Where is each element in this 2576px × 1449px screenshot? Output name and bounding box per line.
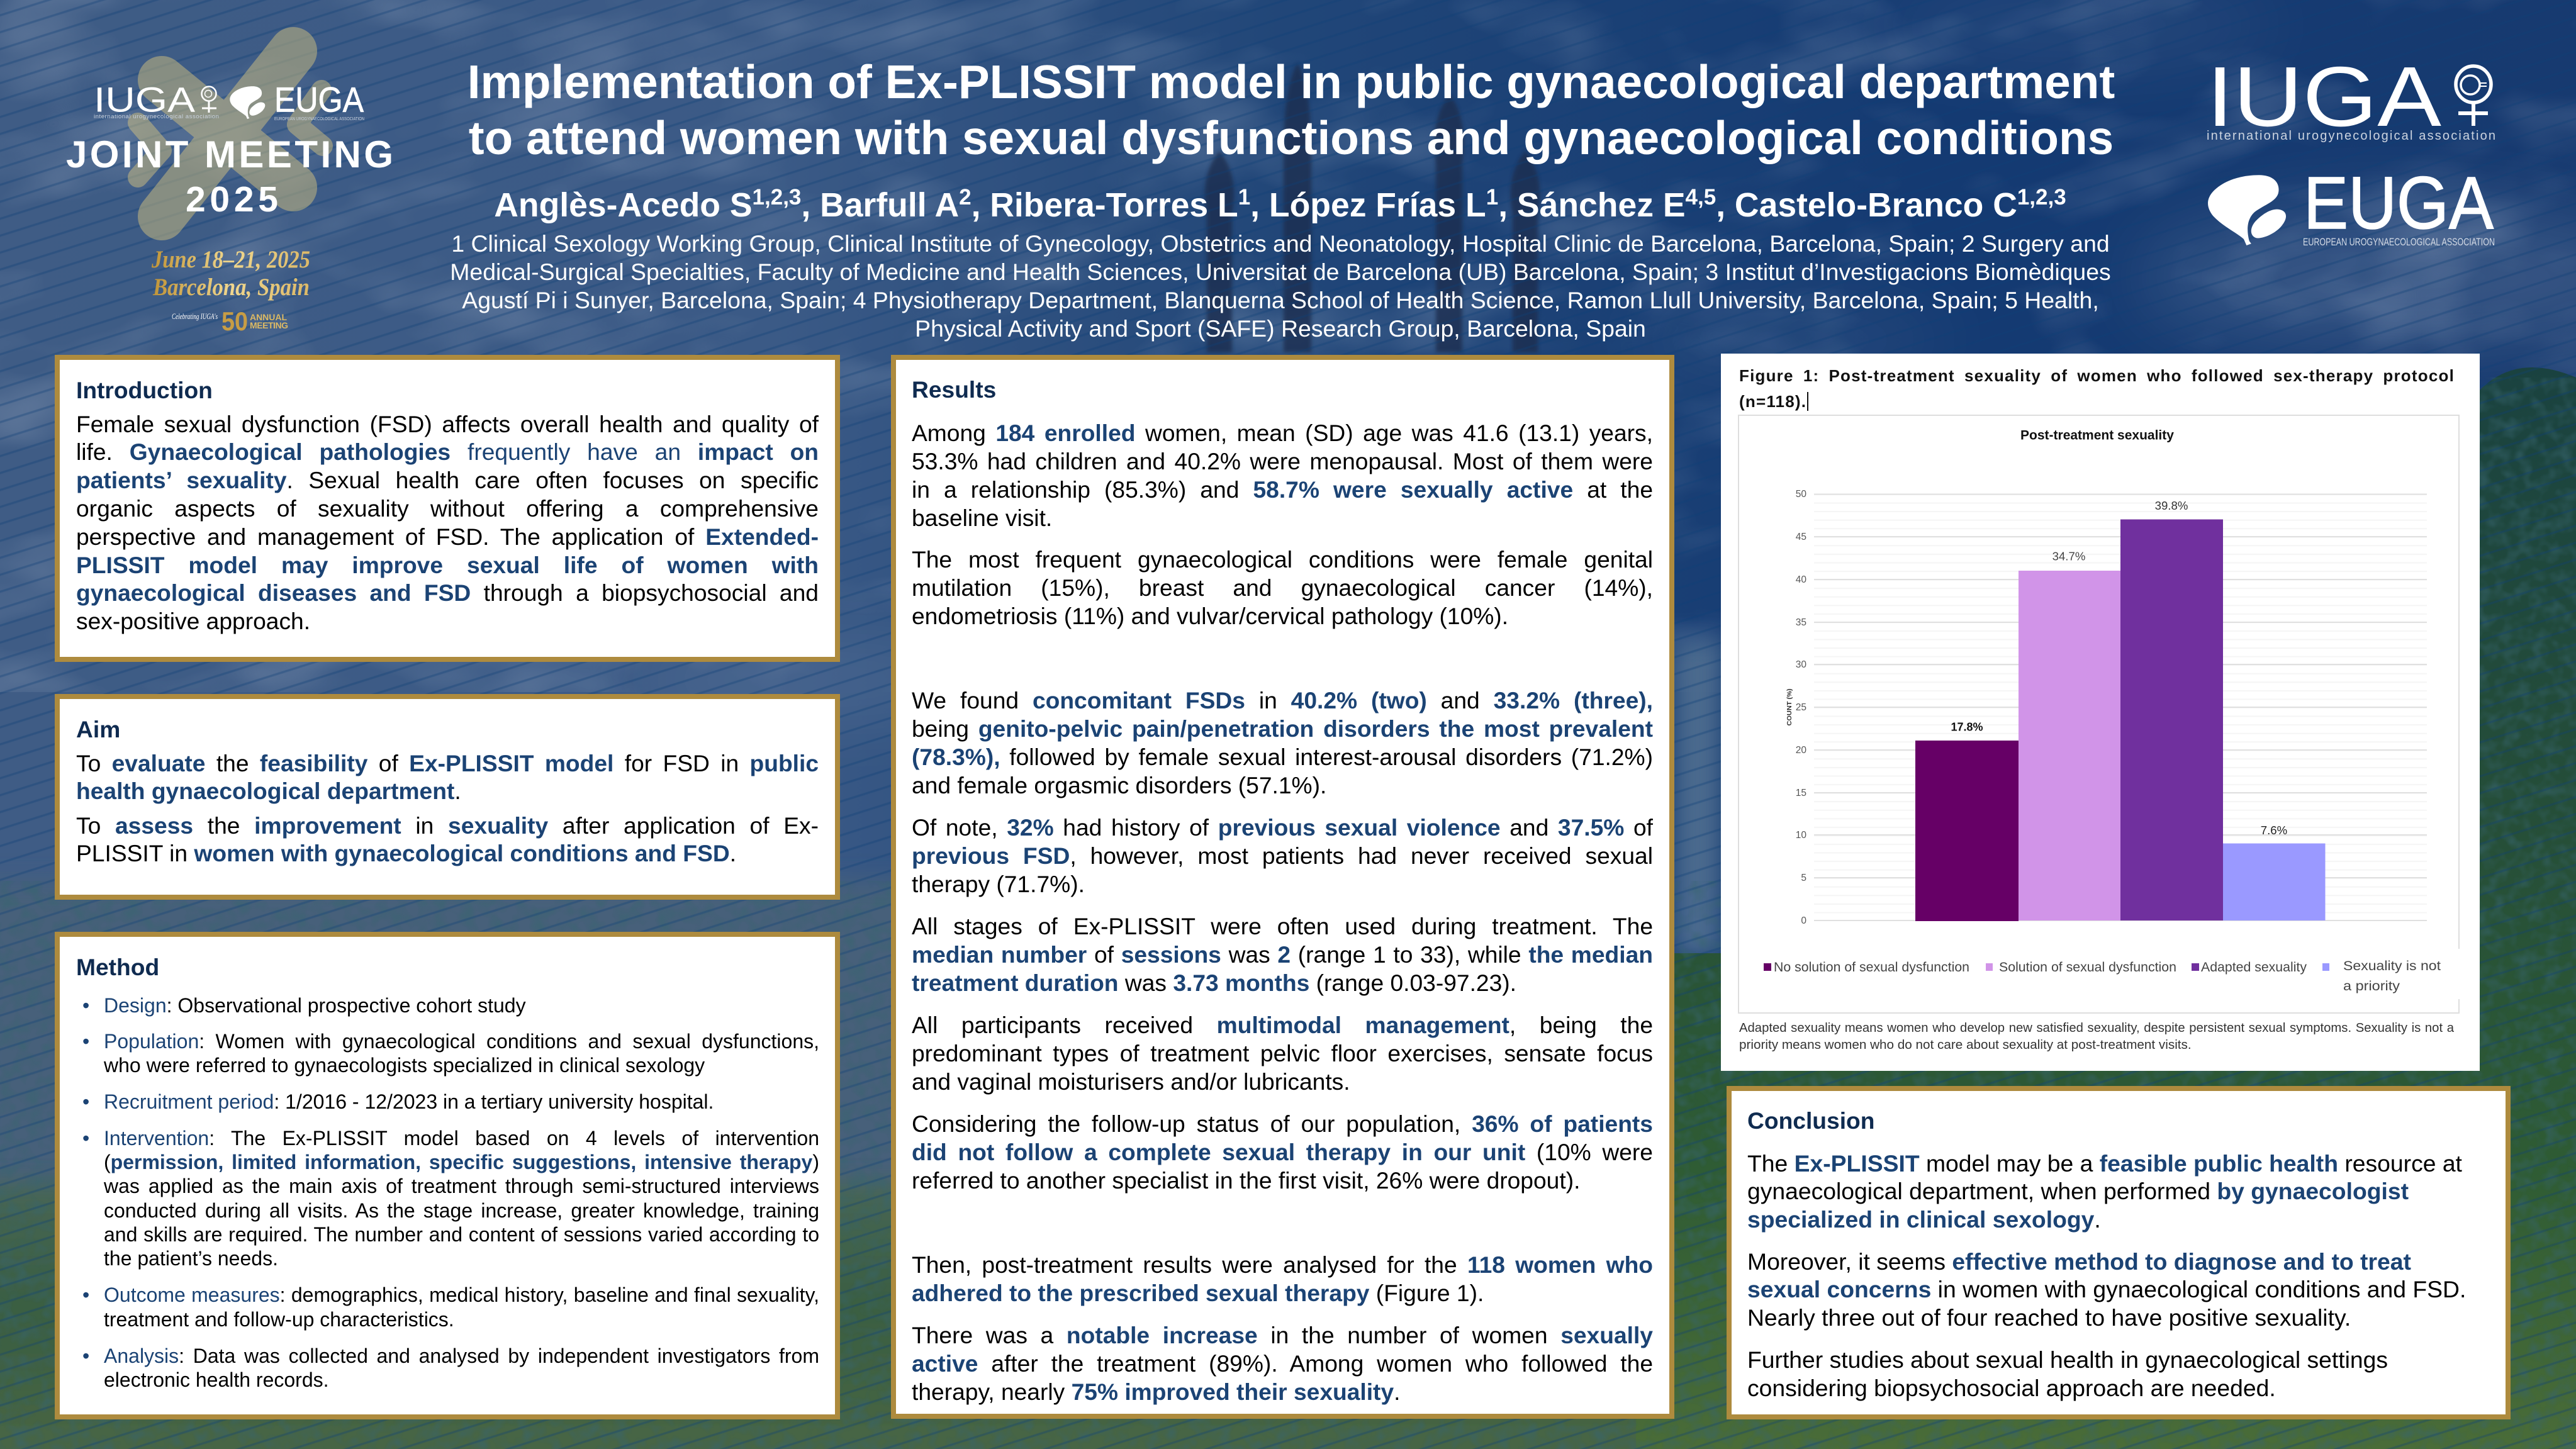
50th annual meeting mark: ANNUAL [250, 312, 287, 322]
text: enrolled women: baseline visit. [912, 505, 1052, 531]
heading: introduction: Introduction [76, 377, 213, 403]
50th annual meeting mark: MEETING [250, 320, 288, 330]
text: concomitant FSDs [912, 686, 1653, 799]
bar: adapted sexuality [2120, 520, 2223, 920]
text: history [912, 814, 1653, 898]
y axis labels: 20 [1796, 745, 1806, 756]
text: conclusion effectiveness: Moreover, it seems effective method to diagnose and to treat [1747, 1248, 2411, 1275]
y axis labels: 35 [1796, 617, 1806, 628]
text: sessions: median number of sessions was 2 (range 1 to 33), while the median [912, 941, 1653, 968]
panel: method: • [82, 1345, 89, 1367]
heading: method: Method [76, 954, 159, 980]
y axis labels: 10 [1796, 830, 1806, 841]
affiliations: Medical-Surgical Specialties, Faculty of Medicine and Health Sciences, Universitat de Barcelona (UB) Barcelona, Spain; 3 Institut d’Investigacions Biomèdiques [450, 259, 2111, 285]
bullet: intervention: conducted during all visits. As the stage increase, greater knowledge, training [104, 1199, 819, 1222]
panel: results [891, 355, 1674, 1419]
figure note: Adapted sexuality means women who develop new satisfied sexuality, despite persistent sexual symptoms. Sexuality is not a [1739, 1021, 2454, 1035]
text: multimodal management [912, 1011, 1653, 1096]
text: introduction body: gynaecological diseases and FSD through a biopsychosocial and [76, 579, 819, 606]
gridlines [1814, 494, 2427, 920]
text: aim second objective: To assess the improvement in sexuality after application of Ex- [76, 812, 819, 839]
bullet: analysis: Analysis: Data was collected and analysed by independent investigators from [104, 1345, 819, 1367]
text: history: Of note, 32% had history of previous sexual violence and 37.5% of [912, 814, 1653, 841]
bar: solution of sexual dysfunction [2019, 571, 2120, 920]
text: aim first objective: To evaluate the feasibility of Ex-PLISSIT model for FSD in public [76, 750, 819, 776]
IUGA logo small: IUGA [94, 79, 196, 120]
bar: sexuality is not a priority [2223, 843, 2326, 920]
text: conclusion feasibility: specialized in clinical sexology. [1747, 1206, 2101, 1233]
text: conclusion feasibility: gynaecological department, when performed by gynaecologist [1747, 1178, 2409, 1204]
bullet: outcome measures: treatment and follow-up characteristics. [104, 1308, 454, 1331]
text: enrolled women: in a relationship (85.3%) and 58.7% were sexually active at the [912, 476, 1653, 503]
joint meeting text [66, 133, 393, 220]
affiliations: 1 Clinical Sexology Working Group, Clinical Institute of Gynecology, Obstetrics and Neonatology, Hospital Clinic de Barcelona, Barcelona, Spain; 2 Surgery and [451, 230, 2110, 257]
text: conclusion feasibility [1747, 1150, 2490, 1233]
text: aim second objective [76, 812, 819, 866]
text: enrolled women: 53.3% had children and 40.2% were menopausal. Most of them were [912, 448, 1653, 474]
text: conclusion feasibility: The Ex-PLISSIT model may be a feasible public health resource at [1747, 1150, 2462, 1177]
title: to attend women with sexual dysfunctions and gynaecological conditions [469, 111, 2114, 164]
text: post-treatment analysis: Then, post-treatment results were analysed for the 118 women who [912, 1251, 1653, 1278]
panel: introduction [55, 355, 840, 662]
affiliations: Physical Activity and Sport (SAFE) Research Group, Barcelona, Spain [915, 315, 1646, 342]
panel: method: • [82, 1127, 89, 1150]
bar value labels: 7.6% [2261, 824, 2287, 837]
EUGA logo [2208, 162, 2495, 248]
affiliations: Agustí Pi i Sunyer, Barcelona, Spain; 4 Physiotherapy Department, Blanquerna School of Health Science, Ramon Llull University, Barcelona, Spain; 5 Health, [462, 287, 2099, 313]
IUGA logo: international urogynecological association [2207, 129, 2495, 143]
logos: IUGA and EUGA [2207, 50, 2495, 248]
text: gynaecological conditions [912, 545, 1653, 630]
bullet: population: Population: Women with gynaecological conditions and sexual dysfunctions, [104, 1030, 819, 1053]
text: notable increase [912, 1321, 1653, 1406]
panel: method: • [82, 994, 89, 1017]
50th annual meeting mark: 50 [221, 306, 248, 336]
bullet: recruitment period: Recruitment period: 1/2016 - 12/2023 in a tertiary university hospital. [104, 1090, 714, 1113]
text: aim first objective: health gynaecological department. [76, 778, 461, 804]
text: introduction body: Female sexual dysfunction (FSD) affects overall health and quality of [76, 411, 819, 437]
bullet: analysis [104, 1344, 819, 1392]
text: multimodal management: All participants received multimodal management, being the [912, 1012, 1653, 1038]
text: conclusion further studies [1747, 1346, 2490, 1402]
text: notable increase: therapy, nearly 75% improved their sexuality. [912, 1379, 1400, 1405]
EUGA logo: EUGA [2304, 162, 2494, 245]
legend: No solution of sexual dysfunction [1774, 959, 1969, 975]
logo block: joint meeting [66, 27, 393, 336]
text: sessions [912, 912, 1653, 997]
affiliations [450, 230, 2111, 342]
title: Implementation of Ex-PLISSIT model in public gynaecological department [468, 55, 2115, 108]
EUGA logo small: EUROPEAN UROGYNAECOLOGICAL ASSOCIATION [274, 116, 364, 121]
50th annual meeting mark: Celebrating IUGA's [172, 311, 218, 321]
text: conclusion effectiveness [1747, 1248, 2490, 1331]
text: conclusion further studies: considering biopsychosocial approach are needed. [1747, 1375, 2276, 1401]
bar: no solution of sexual dysfunction [1915, 741, 2019, 921]
text: introduction body: sex-positive approach. [76, 608, 310, 634]
text: follow-up [912, 1110, 1653, 1195]
icon: tan X emblem [138, 51, 323, 216]
panel: method: • [82, 1090, 89, 1113]
authors: Anglès-Acedo S1,2,3, Barfull A2, Ribera-Torres L1, López Frías L1, Sánchez E4,5, Castelo-Branco C1,2,3 [494, 185, 2066, 224]
text: sessions: All stages of Ex-PLISSIT were often used during treatment. The [912, 913, 1653, 939]
text: gynaecological conditions: The most frequent gynaecological conditions were female genital [912, 546, 1653, 573]
figure title: (n=118). [1739, 392, 1806, 411]
panel: method: • [82, 1030, 89, 1053]
text: enrolled women [912, 419, 1653, 532]
bar chart [1738, 415, 2460, 1014]
IUGA logo small [94, 79, 219, 120]
figure title [1739, 363, 2455, 415]
bullet: intervention: Intervention: The Ex-PLISSIT model based on 4 levels of intervention [104, 1127, 819, 1150]
bullet: intervention [82, 1127, 819, 1270]
50th annual meeting mark [172, 306, 288, 336]
text: follow-up: did not follow a complete sexual therapy in our unit (10% were [912, 1139, 1653, 1165]
date and place [151, 246, 310, 301]
text: concomitant FSDs: being genito-pelvic pain/penetration disorders the most prevalent [912, 715, 1653, 742]
text: aim first objective [76, 750, 819, 804]
panel: aim [55, 694, 840, 900]
bar value labels: 34.7% [2052, 550, 2085, 562]
bullet: intervention: and skills are required. The number and content of sessions varied according to [104, 1223, 819, 1246]
bar value labels: 39.8% [2155, 499, 2188, 512]
figure note [1739, 1020, 2454, 1053]
heading: aim: Aim [76, 716, 120, 742]
text: follow-up: referred to another specialist in the first visit, 26% were dropout). [912, 1167, 1580, 1194]
bar value labels [1951, 499, 2287, 837]
IUGA logo small: international urogynecological association [94, 113, 219, 120]
bullet: intervention: the patient’s needs. [104, 1247, 278, 1270]
text: concomitant FSDs: We found concomitant FSDs in 40.2% (two) and 33.2% (three), [912, 687, 1653, 713]
text: follow-up: Considering the follow-up status of our population, 36% of patients [912, 1111, 1653, 1137]
text: gynaecological conditions: mutilation (15%), breast and gynaecological cancer (14%), [912, 574, 1653, 601]
heading: results: Results [912, 376, 996, 403]
y axis labels [1796, 489, 1806, 926]
text: enrolled women: Among 184 enrolled women, mean (SD) age was 41.6 (13.1) years, [912, 420, 1653, 446]
chart title: Post-treatment sexuality [2020, 428, 2174, 443]
text: aim second objective: PLISSIT in women with gynaecological conditions and FSD. [76, 840, 736, 866]
text: conclusion further studies: Further studies about sexual health in gynaecological settings [1747, 1346, 2388, 1373]
bullet: population: who were referred to gynaecologists specialized in clinical sexology [104, 1054, 705, 1077]
text: introduction body: perspective and management of FSD. The application of Extended- [76, 523, 819, 550]
text: concomitant FSDs: (78.3%), followed by female sexual interest-arousal disorders (71.2%) [912, 744, 1653, 770]
bar value labels: 17.8% [1951, 721, 1983, 734]
text: introduction body [76, 411, 819, 634]
heading: conclusion: Conclusion [1747, 1107, 1874, 1134]
legend: Solution of sexual dysfunction [1999, 959, 2176, 975]
text: notable increase: There was a notable increase in the number of women sexually [912, 1322, 1653, 1348]
legend: Sexuality is not [2343, 958, 2441, 973]
text: introduction body: PLISSIT model may improve sexual life of women with [76, 552, 819, 578]
text: conclusion effectiveness: Nearly three out of four reached to have positive sexuality. [1747, 1304, 2351, 1331]
joint meeting text: 2025 [186, 179, 278, 220]
bullet: outcome measures [104, 1283, 819, 1331]
EUGA logo small: EUGA [274, 79, 364, 120]
bullet: population [82, 1030, 819, 1077]
y axis labels: 50 [1796, 489, 1806, 500]
y axis labels: 25 [1796, 702, 1806, 713]
text: gynaecological conditions: endometriosis (11%) and vulvar/cervical pathology (10%). [912, 603, 1508, 629]
joint meeting text: JOINT MEETING [66, 133, 393, 176]
y axis labels: 0 [1801, 915, 1806, 926]
text: introduction body: patients’ sexuality. Sexual health care often focuses on specific [76, 467, 819, 493]
y axis labels: 15 [1796, 788, 1806, 798]
IUGA logo: IUGA [2207, 50, 2441, 144]
y axis labels: 40 [1796, 574, 1806, 585]
text: post-treatment analysis: adhered to the prescribed sexual therapy (Figure 1). [912, 1280, 1484, 1306]
title [468, 55, 2115, 164]
text: introduction body: life. Gynaecological pathologies frequently have an impact on [76, 439, 819, 465]
text: multimodal management: predominant types of treatment pelvic floor exercises, sensate focus [912, 1040, 1653, 1066]
y axis labels: 5 [1801, 873, 1806, 883]
legend: a priority [2343, 978, 2400, 993]
panel: method: • [82, 1284, 89, 1306]
figure title: Figure 1: Post-treatment sexuality of women who followed sex-therapy protocol [1739, 366, 2455, 385]
text: history: previous FSD, however, most patients had never received sexual [912, 842, 1653, 869]
legend: Adapted sexuality [2201, 959, 2307, 975]
legend [1764, 958, 2441, 993]
bullet: analysis: electronic health records. [104, 1368, 329, 1391]
bullet: design: Design: Observational prospective cohort study [104, 994, 526, 1017]
y axis labels: 45 [1796, 532, 1806, 542]
figure note: priority means women who do not care about sexuality at post-treatment visits. [1739, 1037, 2192, 1052]
text: post-treatment analysis [912, 1251, 1653, 1307]
text: multimodal management: and vaginal moisturisers and/or lubricants. [912, 1068, 1350, 1095]
y axis title: COUNT (%) [1786, 688, 1793, 726]
panel: conclusion [1727, 1086, 2511, 1419]
date and place: June 18–21, 2025 [151, 246, 310, 273]
bullet: intervention: was applied as the main axis of treatment through semi-structured interviews [104, 1175, 819, 1197]
bullet: outcome measures: Outcome measures: demographics, medical history, baseline and final sexuality, [104, 1284, 819, 1306]
panel: figure [1721, 354, 2480, 1071]
bullet: intervention: (permission, limited information, specific suggestions, intensive therapy) [104, 1151, 819, 1173]
text: history: therapy (71.7%). [912, 871, 1085, 897]
text: sessions: treatment duration was 3.73 months (range 0.03-97.23). [912, 970, 1516, 996]
text: introduction body: organic aspects of sexuality without offering a comprehensive [76, 495, 819, 522]
text: conclusion effectiveness: sexual concerns in women with gynaecological conditions and FSD. [1747, 1276, 2466, 1302]
date and place: Barcelona, Spain [152, 274, 310, 301]
text: concomitant FSDs: and female orgasmic disorders (57.1%). [912, 772, 1326, 798]
y axis labels: 30 [1796, 659, 1806, 670]
panel: method [55, 932, 840, 1419]
EUGA logo small [230, 79, 364, 121]
text: notable increase: active after the treatment (89%). Among women who followed the [912, 1350, 1653, 1377]
